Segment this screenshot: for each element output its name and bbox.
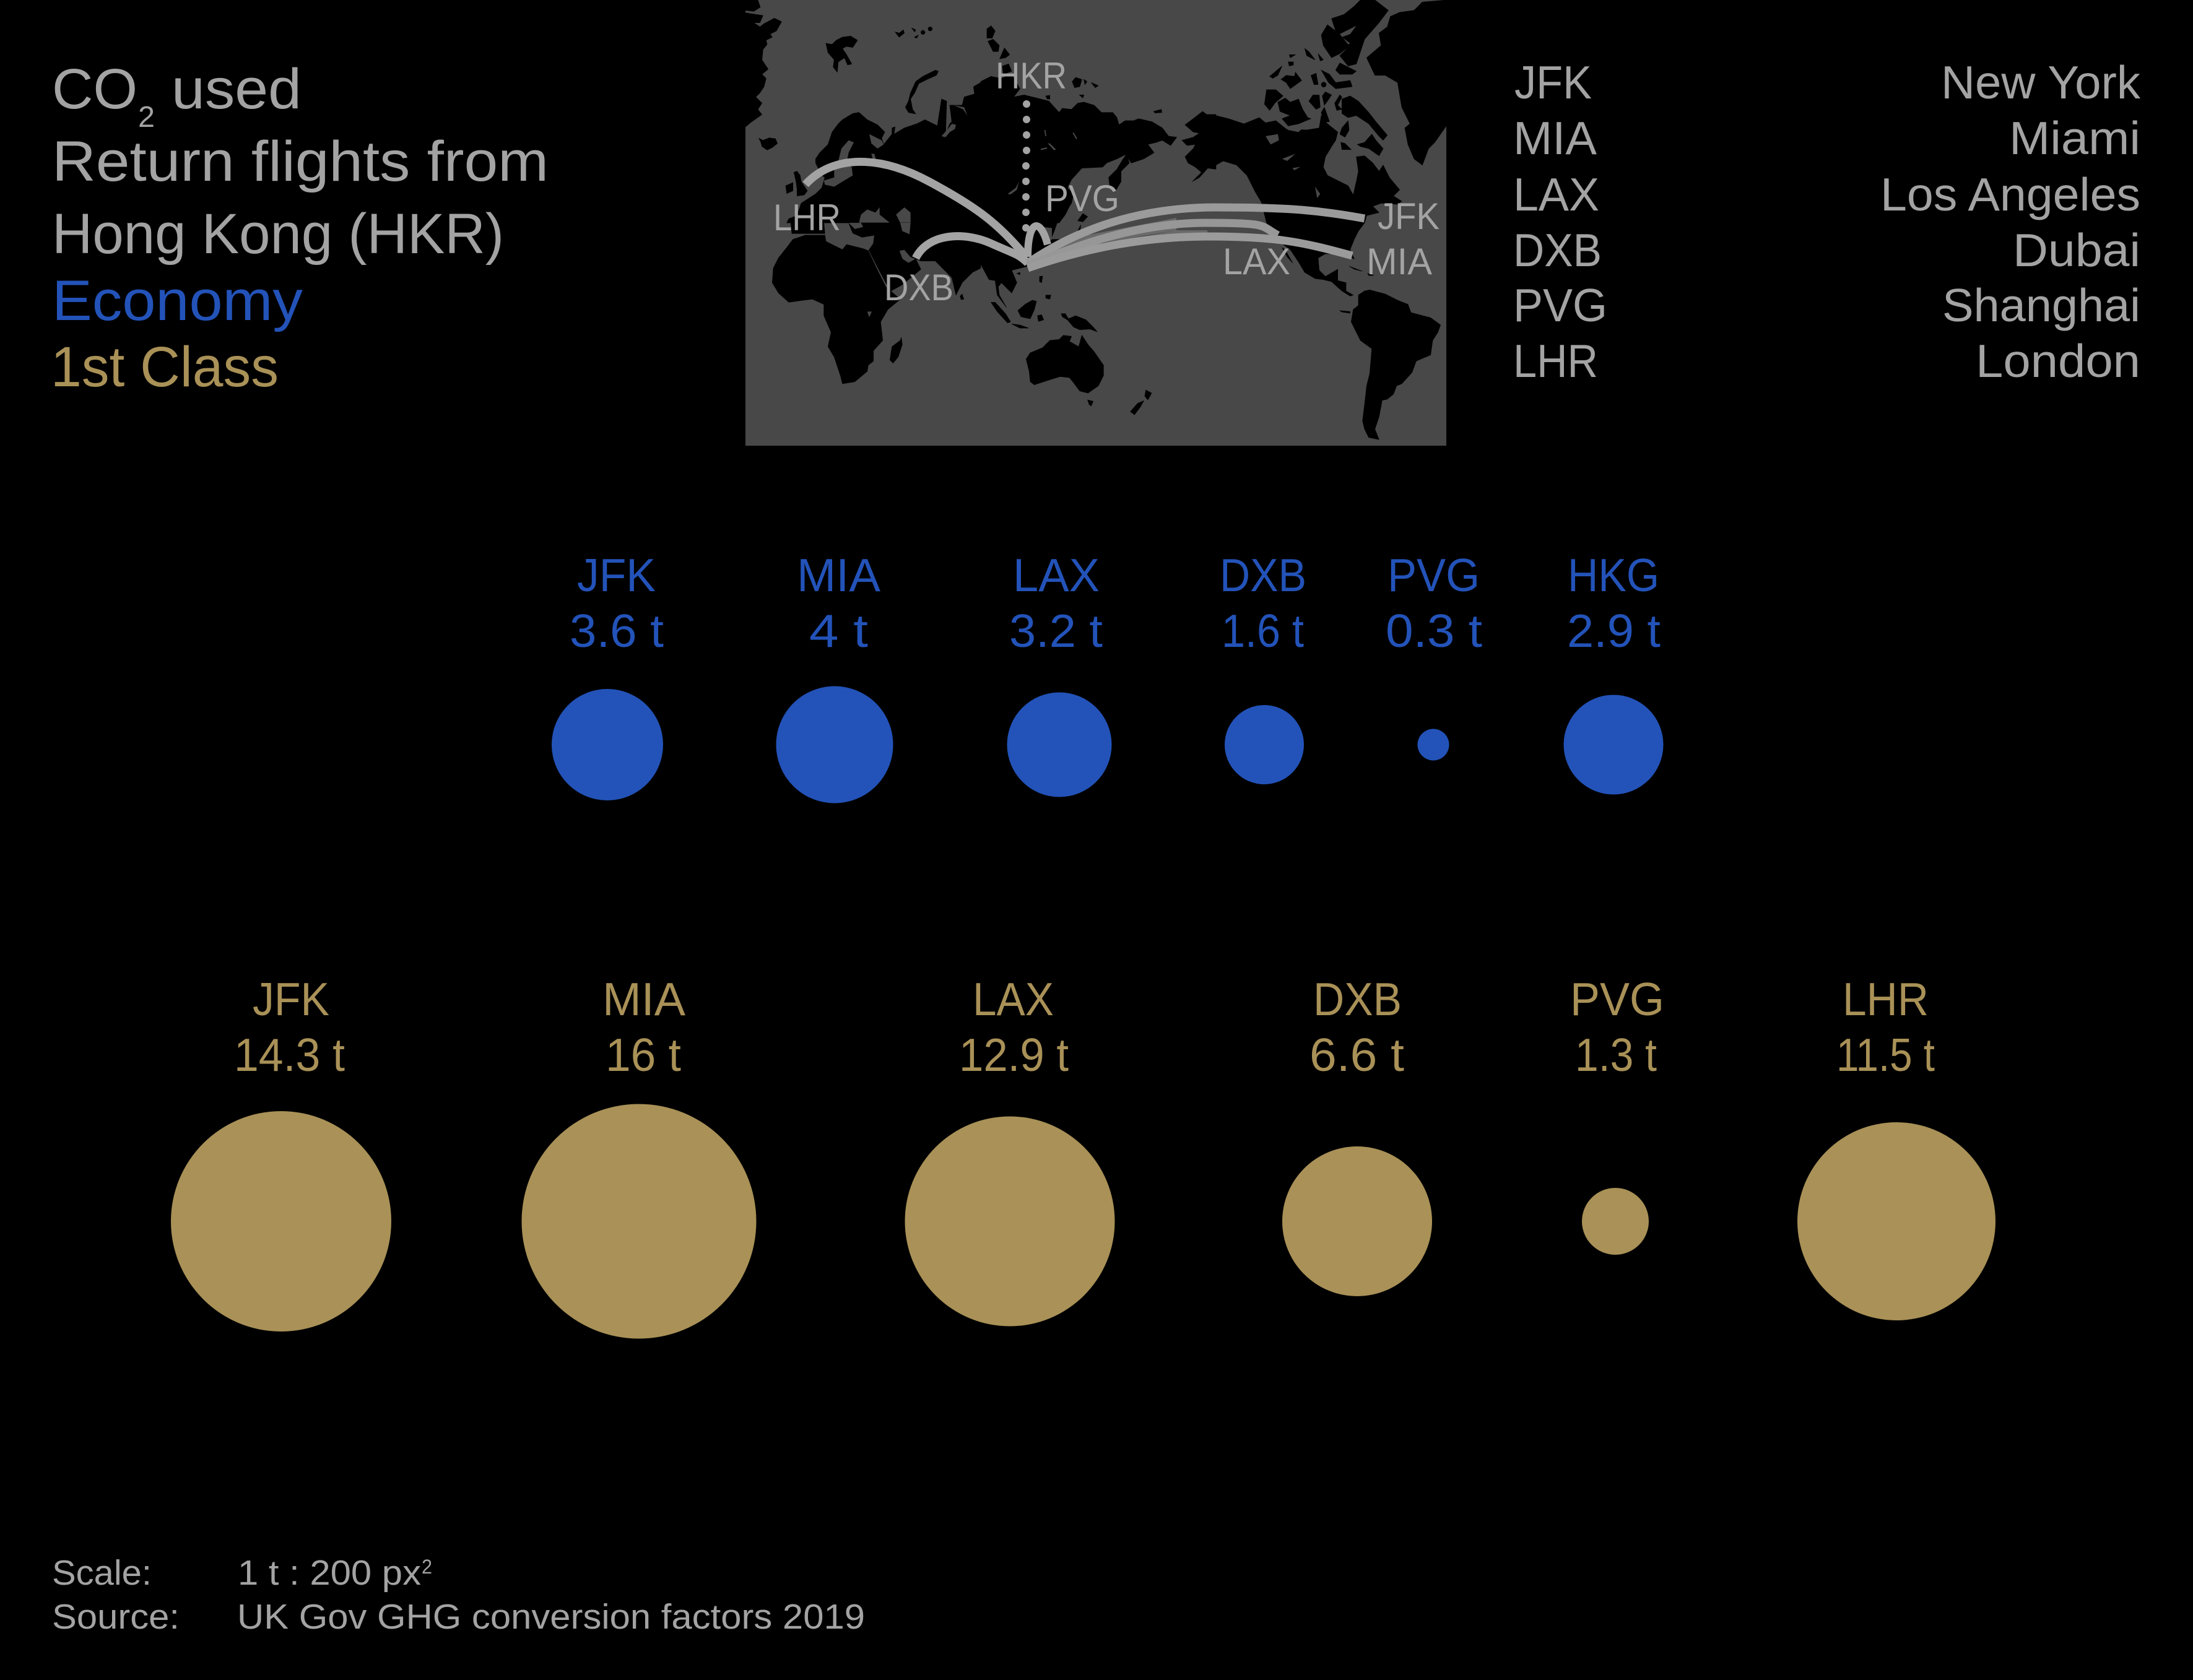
flight path: Miami [1028, 236, 1352, 268]
economy: JFK: JFK [577, 549, 656, 601]
flight path: London [806, 162, 1025, 255]
economy: PVG: PVG [1387, 549, 1480, 601]
footer: scale: 1 t : 200 px [238, 1553, 421, 1593]
flight path: New York [1028, 207, 1365, 263]
flight path: Shanghai [1028, 226, 1048, 257]
land: Canada, Arctic islands and Greenland [1216, 0, 1446, 223]
footer notes [52, 1553, 865, 1637]
footer: source: UK Gov GHG conversion factors 2019 [237, 1597, 865, 1637]
first class: PVG: PVG [1570, 973, 1664, 1025]
land: north Atlantic and Europe [745, 0, 981, 223]
dotted line: Hong Kong marker [1022, 100, 1030, 232]
title: CO2 used: 2 [138, 101, 155, 134]
flight path: Los Angeles [1028, 223, 1278, 266]
key: DXB: DXB [1513, 224, 1602, 276]
economy: PVG [1386, 549, 1482, 760]
map label: JFK: JFK [1378, 196, 1440, 237]
land: Africa, Arabia and India [772, 223, 981, 384]
first class: LAX: LAX [973, 973, 1054, 1025]
key: LAX: Los Angeles [1880, 168, 2140, 220]
economy row [552, 549, 1663, 803]
key: DXB: Dubai [2013, 224, 2140, 276]
legend: Economy: Economy [52, 269, 303, 332]
land: Southeast Asia and Australia [981, 223, 1152, 415]
key: PVG: PVG [1513, 279, 1607, 331]
map label: DXB: DXB [884, 267, 953, 308]
key: LHR: London [1976, 335, 2140, 387]
economy: LAX: LAX [1013, 549, 1100, 601]
footer: scale: Scale: [52, 1553, 152, 1593]
first class: LHR: LHR [1843, 973, 1929, 1025]
economy: HKG [1564, 549, 1663, 795]
title: CO2 used [52, 58, 302, 134]
map label: HKR: HKR [996, 55, 1067, 97]
first class: JFK: 14.3 t [234, 1029, 345, 1081]
footer: source: Source: [52, 1597, 180, 1637]
footer: scale [52, 1553, 432, 1593]
map label: MIA: MIA [1366, 241, 1432, 282]
key: MIA [1513, 112, 2140, 164]
economy: LAX [1007, 549, 1112, 797]
economy: MIA [776, 549, 893, 803]
key: LHR: LHR [1513, 335, 1598, 387]
key: PVG [1513, 279, 2140, 331]
map label: LHR: LHR [773, 197, 841, 238]
first class: MIA: MIA [602, 973, 685, 1025]
economy: DXB [1220, 549, 1306, 784]
footer: scale: 2 [422, 1556, 432, 1578]
first class: PVG: 1.3 t [1575, 1029, 1657, 1081]
world map panel [745, 0, 1446, 446]
first class: DXB: DXB [1313, 973, 1402, 1025]
key: JFK: JFK [1514, 56, 1592, 108]
economy: MIA: 4 t [809, 605, 868, 657]
first class: DXB [1282, 973, 1432, 1296]
flight path: Dubai [916, 236, 1028, 263]
first class: PVG [1570, 973, 1664, 1255]
first class row [171, 973, 1995, 1338]
title block [51, 58, 549, 399]
economy: JFK [552, 549, 664, 800]
first class: MIA [521, 973, 757, 1338]
key: JFK [1514, 56, 2140, 108]
first class: DXB: 6.6 t [1309, 1029, 1404, 1081]
legend: 1st Class: 1st Class [51, 336, 279, 399]
first class: JFK [171, 973, 391, 1331]
key: PVG: Shanghai [1942, 279, 2140, 331]
land: Central and South America [1267, 223, 1441, 439]
key: JFK: New York [1941, 56, 2140, 108]
economy: HKG: HKG [1568, 549, 1659, 601]
first class: LAX: 12.9 t [959, 1029, 1069, 1081]
map label: PVG: PVG [1045, 178, 1119, 219]
economy: DXB: 1.6 t [1222, 605, 1304, 657]
title: CO2 used: CO [52, 58, 137, 121]
flight shadow wedge [1029, 218, 1207, 266]
economy: PVG: 0.3 t [1386, 605, 1482, 657]
first class: LHR [1797, 973, 1995, 1320]
economy: LAX: 3.2 t [1009, 605, 1103, 657]
first class: LAX [905, 973, 1114, 1326]
key: LAX [1513, 168, 2140, 220]
economy: DXB: DXB [1220, 549, 1306, 601]
title: return flights from: Return flights from [52, 130, 549, 193]
key: MIA: Miami [2009, 112, 2140, 164]
first class: LHR: 11.5 t [1836, 1029, 1935, 1081]
economy: JFK: 3.6 t [570, 605, 664, 657]
title: CO2 used: used [172, 58, 302, 121]
map label: LAX: LAX [1223, 241, 1290, 282]
key: LAX: LAX [1513, 168, 1599, 220]
key: DXB [1513, 224, 2140, 276]
economy: MIA: MIA [797, 549, 880, 601]
airport code key [1513, 56, 2140, 387]
title: Hong Kong (HKR): Hong Kong (HKR) [52, 202, 504, 266]
key: MIA: MIA [1513, 112, 1597, 164]
land: Siberia and Alaska [981, 26, 1216, 223]
key: LHR [1513, 335, 2140, 387]
first class: MIA: 16 t [606, 1029, 681, 1081]
economy: HKG: 2.9 t [1567, 605, 1661, 657]
first class: JFK: JFK [253, 973, 329, 1025]
